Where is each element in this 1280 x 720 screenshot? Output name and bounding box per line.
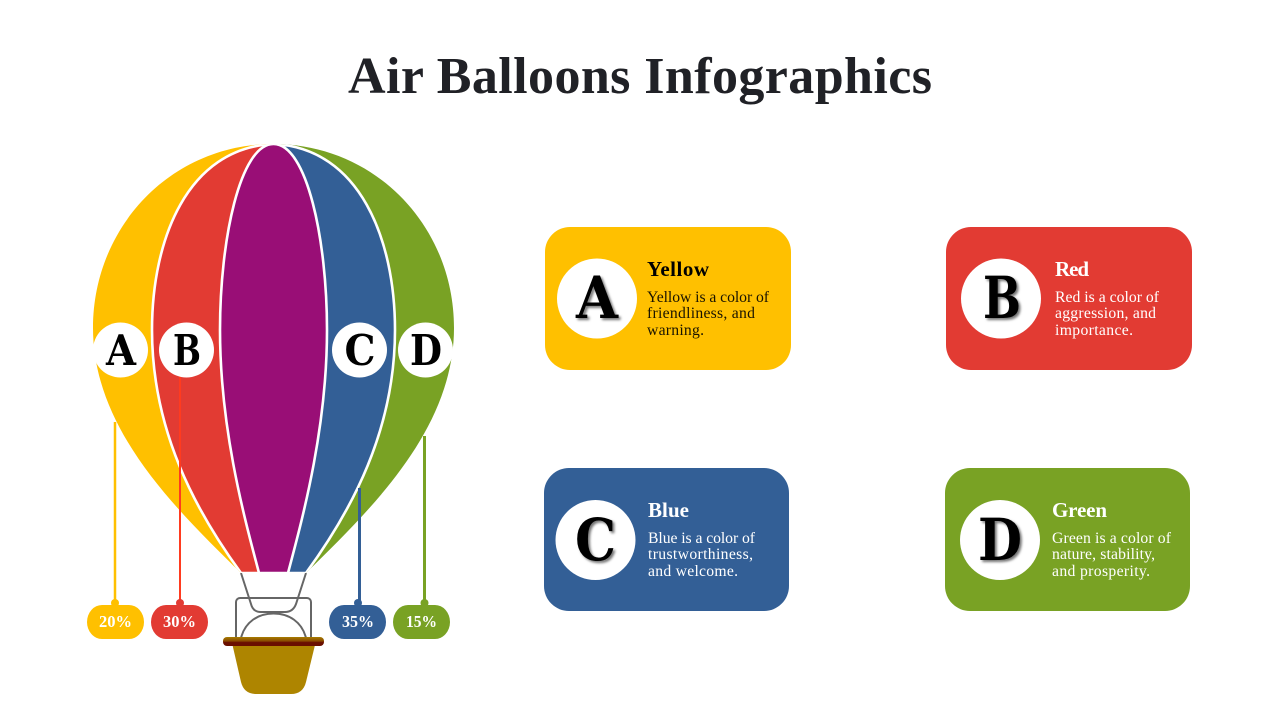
letter badge B	[961, 258, 1041, 338]
percentage pill: 15%: 15%	[406, 612, 437, 631]
percentage pill: 15%	[393, 605, 450, 639]
connector: B	[176, 376, 184, 607]
description: Green: Green is a color of	[1052, 530, 1172, 547]
percentage pill: 35%: 35%	[342, 612, 374, 631]
letter badge C	[556, 500, 636, 580]
percentage pill: 30%	[151, 605, 208, 639]
basket frame and ropes	[236, 573, 311, 642]
balloon badge A	[93, 322, 148, 378]
connector: C	[354, 488, 362, 607]
description: Yellow: warning.	[647, 322, 704, 339]
balloon badge B	[159, 322, 214, 378]
description: Red: Red is a color of	[1055, 289, 1160, 306]
percentage pill: 20%: 20%	[99, 612, 132, 631]
panel: Green	[945, 468, 1190, 611]
heading: Blue: Blue	[648, 498, 689, 522]
panel: Red	[946, 227, 1192, 370]
heading: Yellow: Yellow	[647, 257, 710, 281]
balloon badge D: D	[410, 326, 442, 375]
description: Blue: and welcome.	[648, 563, 738, 580]
description: Blue: trustworthiness,	[648, 546, 753, 563]
description: Blue: Blue is a color of	[648, 530, 756, 547]
panel: Blue	[544, 468, 789, 611]
description: Yellow: Yellow is a color of	[647, 289, 770, 306]
percentage pill: 20%	[87, 605, 144, 639]
letter badge A	[557, 258, 637, 338]
percentage pill: 35%	[329, 605, 386, 639]
basket rim	[223, 637, 324, 646]
balloon envelope	[90, 140, 458, 580]
title: Air Balloons Infographics	[348, 48, 932, 105]
description: Red: importance.	[1055, 322, 1133, 339]
balloon badge C: C	[344, 326, 376, 375]
description: Yellow: friendliness, and	[647, 305, 755, 322]
description: Green: nature, stability,	[1052, 546, 1155, 563]
letter badge D: D	[978, 506, 1022, 574]
basket	[232, 645, 315, 694]
letter badge C: C	[575, 506, 616, 574]
percentage pill: 30%: 30%	[163, 612, 196, 631]
letter badge A: A	[575, 264, 619, 332]
letter badge B: B	[983, 264, 1021, 332]
connector: D	[420, 436, 428, 607]
panel: Yellow	[545, 227, 791, 370]
balloon badge A: A	[105, 326, 137, 375]
balloon badge B: B	[173, 326, 201, 375]
heading: Red: Red	[1055, 257, 1089, 281]
hot air balloon	[90, 140, 458, 694]
description: Red: aggression, and	[1055, 305, 1156, 322]
balloon badge C	[332, 322, 387, 378]
description: Green: and prosperity.	[1052, 563, 1150, 580]
balloon badge D	[398, 322, 453, 378]
letter badge D	[960, 500, 1040, 580]
connector: A	[111, 422, 119, 607]
heading: Green: Green	[1052, 498, 1107, 522]
